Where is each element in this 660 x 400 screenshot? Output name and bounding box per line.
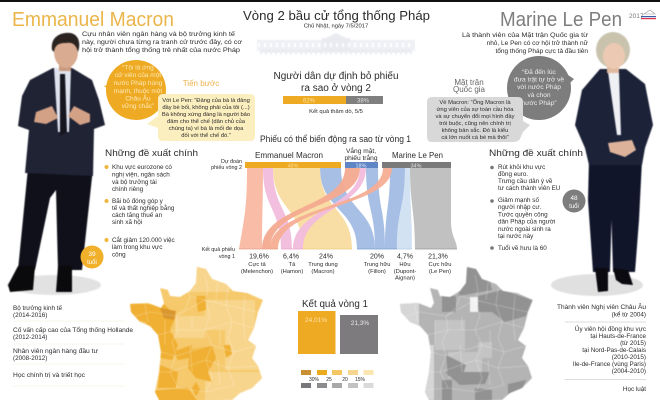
intro text: Le Pen: nhỏ, Le Pen có cơ hội trở thành nữ	[487, 39, 589, 47]
round 1 labels: Cực tả	[248, 262, 266, 268]
proposals: Macron: sinh xã hội	[112, 219, 142, 226]
party label: Tiến bước: Tiến bước	[183, 79, 219, 88]
round 1 labels: 24%	[319, 254, 333, 260]
callout: Macron on Le Pen: đảm cho thể chế (dân chủ của	[167, 118, 246, 125]
round 1 labels: 19,6%	[249, 254, 269, 260]
career timeline: Macron: (2012-2014)	[13, 334, 47, 341]
proposals: Le Pen	[489, 148, 583, 252]
callout: Le Pen on Macron	[427, 97, 530, 142]
quote bubble: Le Pen: nước Pháp”	[521, 100, 557, 107]
callout: Macron on Le Pen: Với Le Pen: “Đảng của bà là đảng	[162, 97, 250, 104]
baseline	[239, 248, 457, 250]
chart heading: Phiếu có thể biến động ra sao từ vòng 1	[260, 134, 411, 144]
round 1 labels: Cực hữu	[429, 262, 451, 268]
poll panel: ra sao ở vòng 2	[301, 82, 371, 94]
quote bubble: Macron: cử viên của một	[115, 71, 161, 79]
age badge: 48	[562, 190, 586, 212]
round 1 labels: Trung dung	[308, 262, 338, 268]
round 1 labels: (Dupont-	[394, 269, 416, 275]
callout: Le Pen on Macron: Về Macron: “Ông Macron là	[439, 99, 511, 106]
proposals: Macron: làm trong khu vực	[112, 244, 162, 251]
proposals: Le Pen: đồng euro.	[498, 169, 528, 178]
photo: Le Pen	[551, 32, 653, 296]
main title: Vòng 2 bầu cử tổng thống Pháp	[243, 9, 430, 23]
proposals: Le Pen: Rút khỏi khu vực	[498, 163, 545, 171]
sankey chart: vòng 1	[219, 254, 235, 260]
sankey chart: Emmanuel Macron	[255, 151, 323, 160]
callout: Le Pen on Macron: không bản sắc. Đó là kiểu	[442, 127, 508, 134]
party label: Mặt trận Quốc gia: Mặt trận	[454, 78, 484, 87]
sankey chart: Dự đoán	[221, 159, 242, 165]
career timeline: Le Pen: (kể từ 2004)	[612, 310, 646, 318]
poll panel	[274, 70, 398, 115]
career timeline: Le Pen: Ủy viên hội đồng khu vực	[575, 324, 646, 333]
top bar	[0, 0, 660, 2]
heading: Emmanuel Macron: Emmanuel Macron	[12, 9, 174, 31]
predicted bars	[245, 162, 451, 170]
round 1 labels: Hữu	[399, 262, 411, 268]
sankey chart: phiếu trắng	[344, 153, 378, 162]
poll panel: Kết quả thăm dò, 5/5	[309, 109, 363, 115]
intro text: Le Pen	[462, 30, 589, 55]
career timeline: Macron: Học chính trị và triết học	[13, 370, 85, 379]
proposals: Macron: tế và thất nghiệp bằng	[112, 203, 175, 212]
career timeline: Le Pen: Thành viên Nghị viên Châu Âu	[557, 302, 647, 311]
career timeline: Macron: Bộ trưởng kinh tế	[13, 303, 62, 312]
proposals: Macron: cách tăng thuế an	[112, 210, 163, 219]
proposals: Macron: nghị viện, ngân sách	[112, 172, 170, 178]
age badge: 48: 48	[570, 195, 578, 202]
career timeline: Le Pen: tại Nord-Pas-de-Calais	[582, 347, 646, 354]
proposals: Macron: và bộ trưởng tài	[112, 178, 157, 186]
quote bubble: Le Pen: với nước Pháp	[517, 84, 561, 91]
callout: Le Pen on Macron: cá lớn nuốt cá bé mà thôi”	[441, 135, 509, 141]
age badge: 39: 39	[88, 251, 96, 258]
proposals: Macron: Bãi bỏ đóng góp y	[112, 197, 164, 205]
proposals: Macron: công	[112, 252, 126, 258]
round 1 labels: 4,7%	[397, 254, 413, 260]
quote bubble: Macron: vững chắc”	[122, 101, 154, 110]
round 1 labels: (Melenchon)	[241, 269, 273, 275]
career timeline: Le Pen: Học luật	[623, 386, 646, 393]
intro text: Le Pen: tổng thống Pháp cực tả đầu tiên	[495, 46, 588, 55]
proposals: Macron: chính riêng	[112, 186, 144, 193]
proposals: Macron: Khu vực eurozone có	[112, 164, 172, 171]
round 1 labels: (Macron)	[311, 269, 335, 275]
proposals: Le Pen: dân Pháp của người	[498, 218, 555, 226]
flows	[239, 168, 457, 249]
proposals: Macron	[104, 148, 198, 258]
proposals: Le Pen: nước ngoài sinh ra	[498, 226, 551, 233]
quote bubble: Le Pen	[507, 56, 574, 120]
map legend	[301, 370, 374, 388]
career timeline: Le Pen: (từ 2015)	[620, 340, 646, 347]
intro text: Le Pen: Là thành viên của Mặt trận Quốc gia từ	[462, 30, 589, 39]
poll panel: 38%	[357, 98, 370, 104]
proposals: Le Pen: tại nước này	[498, 233, 534, 240]
party label: Mặt trận Quốc gia	[453, 78, 486, 94]
quote bubble: Macron: nước Pháp hùng	[114, 80, 163, 87]
sankey chart	[202, 134, 457, 282]
main title	[243, 9, 430, 30]
career timeline: Le Pen: (2010-2015)	[612, 354, 646, 361]
predicted bars: 34%	[410, 164, 422, 170]
callout: Le Pen on Macron: ứng viên của sự toàn cầu hóa	[436, 106, 514, 113]
map legend: 15%	[355, 377, 366, 383]
proposals: Le Pen: người nhập cư.	[498, 204, 542, 211]
sankey chart: phiếu vòng 2	[211, 165, 242, 171]
age badge: 39: tuổi	[87, 259, 97, 266]
quote bubble: Le Pen: và chọn	[527, 92, 551, 99]
career timeline: Macron: (2008-2012)	[13, 355, 47, 362]
callout: Macron on Le Pen: Bà không xứng đáng là người bảo	[162, 112, 250, 118]
age badge: 39	[80, 246, 104, 268]
quote bubble: Macron	[104, 60, 166, 120]
proposals: Le Pen: Những đề xuất chính	[489, 148, 583, 159]
proposals: Macron: Cắt giảm 120.000 việc	[112, 235, 175, 244]
career timeline: Le Pen: (2004-2010)	[612, 368, 646, 375]
icon: Élysée palace	[257, 33, 415, 54]
round 1 labels: 20%	[370, 254, 384, 260]
round 1 labels	[241, 254, 451, 282]
career timeline: Le Pen	[557, 302, 647, 393]
round 1 labels: (Hamon)	[281, 269, 303, 275]
map legend: 30%	[309, 377, 320, 383]
round 1 labels: Tả	[289, 262, 296, 268]
poll panel: Người dân dự định bỏ phiếu	[274, 70, 398, 82]
heading: Marine Le Pen: Marine Le Pen	[500, 9, 622, 31]
career timeline: Le Pen: Ile-de-France (vùng Paris)	[573, 361, 646, 368]
sankey chart: Marine Le Pen	[392, 151, 443, 160]
career timeline: Macron: (2014-2016)	[13, 312, 47, 319]
quote bubble: Macron: Châu Âu	[125, 94, 151, 102]
quote bubble: Macron: “Tôi là ứng	[122, 64, 154, 72]
callout: Macron on Le Pen: chúng ta) vì bà là mối đe dọa	[169, 126, 244, 132]
quote bubble: Macron: mạnh, thuộc một	[114, 88, 162, 95]
logo: 2017: 2017	[629, 13, 644, 20]
party label: Mặt trận Quốc gia: Quốc gia	[453, 85, 486, 94]
proposals: Le Pen: Giảm mạnh số	[498, 195, 539, 204]
round 1 labels: (Fillon)	[368, 269, 386, 275]
map: Le Pen results	[400, 266, 534, 400]
panel: round 1 result: 21,3%	[351, 320, 369, 327]
logo: 2017	[629, 10, 656, 20]
callout: Macron on Le Pen: đối với thể chế đó.”	[181, 132, 231, 139]
panel: round 1 result	[298, 298, 378, 388]
proposals: Le Pen: Tuổi về hưu là 60	[498, 243, 547, 252]
quote bubble: Le Pen: đưa trật tự trở về	[514, 74, 564, 84]
photo: Macron	[7, 33, 105, 295]
intro text: Macron: Cựu nhân viên ngân hàng và bộ trưởng kinh tế	[82, 29, 236, 38]
career timeline: Macron: Cố vấn cấp cao của Tổng thống Hollande	[13, 325, 134, 334]
panel: Macron	[7, 9, 255, 386]
callout: Macron on Le Pen: đầy bè bối, không phải của tôi (...)	[162, 104, 250, 111]
panel: Le Pen	[427, 9, 656, 393]
panel: round 1 result: Kết quả vòng 1	[302, 298, 368, 310]
career timeline: Le Pen: tại Hauts-de-France	[590, 333, 646, 340]
map legend: 20	[342, 377, 348, 383]
age badge: 48: tuổi	[569, 203, 579, 210]
callout: Le Pen on Macron: và sự chuyển đổi mọi hình đầy	[436, 113, 515, 120]
map: Macron results	[129, 266, 264, 400]
callout: Le Pen on Macron: trói buộc, cũng nên chính trị	[439, 121, 511, 127]
intro text: Macron	[82, 29, 242, 54]
sankey chart: Vắng mặt,	[346, 146, 376, 155]
quote bubble: Le Pen: “Đã đến lúc	[522, 67, 557, 76]
round 1 labels: 6,4%	[283, 254, 299, 260]
map legend: 25	[326, 377, 332, 383]
proposals: Macron: Những đề xuất chính	[105, 148, 198, 159]
sankey chart: Kết quả phiếu	[202, 247, 235, 253]
intro text: Macron: hội trở thành tổng thống trẻ nhất của nước Pháp	[82, 45, 241, 54]
intro text: Macron: này, người chưa từng ra tranh cử trước đây, có cơ	[82, 38, 242, 46]
proposals: Le Pen: tư cách thành viên EU	[498, 185, 561, 192]
round 1 labels: Aignan)	[395, 276, 415, 282]
predicted bars: 48%	[287, 164, 299, 170]
panel: round 1 result: 24,01%	[305, 317, 327, 324]
career timeline: Macron: Nhân viên ngân hàng đầu tư	[13, 346, 99, 355]
poll panel: 62%	[303, 98, 316, 104]
predicted bars: 18%	[355, 164, 367, 170]
round 1 labels: (Le Pen)	[429, 269, 451, 275]
round 1 labels: Trung hữu	[364, 262, 390, 268]
career timeline: Macron	[13, 303, 134, 386]
round 1 labels: 21,3%	[428, 254, 448, 260]
main title: Chủ Nhật, ngày 7/5/2017	[304, 22, 368, 30]
callout: Macron on Le Pen	[147, 94, 255, 141]
proposals: Le Pen: Trưng cầu dân ý về	[498, 176, 553, 185]
proposals: Le Pen: Tước quyền công	[498, 210, 548, 218]
